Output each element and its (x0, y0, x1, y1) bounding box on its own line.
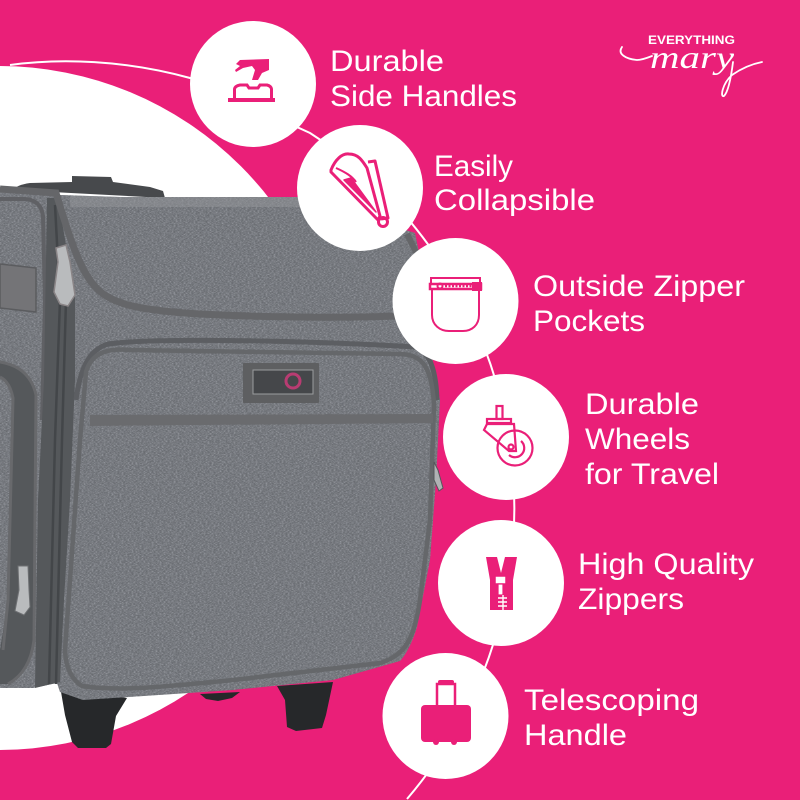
feature circle 4: wheels (443, 374, 569, 500)
front pocket seam (90, 414, 433, 426)
brand logo: Everything Mary (621, 33, 762, 96)
label: High Quality Zippers: Zippers (578, 583, 684, 616)
right wheel foot (277, 682, 333, 731)
lower zipper pull (15, 566, 30, 615)
label: Outside Zipper Pockets: Pockets (533, 305, 645, 338)
label: Telescoping Handle (524, 684, 699, 752)
main vertical zipper band (35, 198, 75, 688)
icon: caster wheel (484, 406, 532, 466)
feature circle 6: telescoping handle (382, 653, 508, 779)
icon: suitcase with handle (421, 680, 471, 745)
brand name plate (243, 363, 319, 403)
label: Durable Side Handles: Durable (330, 45, 444, 78)
left side pocket band (0, 362, 36, 684)
icon: zipper (486, 557, 517, 610)
icon: hand lifting side handle (228, 59, 275, 102)
label: Durable Side Handles: Side Handles (330, 80, 517, 113)
label: High Quality Zippers: High Quality (578, 548, 754, 581)
label: Easily Collapsible (434, 150, 595, 217)
flap right binding (407, 234, 416, 252)
label: Easily Collapsible: Collapsible (434, 184, 595, 217)
bag body (0, 187, 440, 700)
bag fabric texture (0, 170, 450, 710)
side strap patch (0, 264, 36, 312)
icon: zipper pocket (430, 278, 481, 331)
upper zipper pull (54, 245, 75, 306)
right zipper pull (434, 462, 443, 491)
label: Telescoping Handle: Telescoping (524, 684, 699, 717)
zipper teeth (49, 205, 66, 684)
label: Outside Zipper Pockets: Outside Zipper (533, 270, 745, 303)
centre wheel (200, 692, 240, 701)
feature circle 5: zippers (438, 520, 564, 646)
front pocket zipper binding (76, 340, 437, 400)
telescoping handle top (14, 176, 165, 198)
left wheel foot (60, 686, 127, 748)
left pocket binding (0, 362, 36, 684)
brand logo: Everything Mary: EVERYTHING (648, 33, 735, 47)
label: Telescoping Handle: Handle (524, 719, 627, 752)
connector line linking the feature circles (10, 61, 514, 799)
top flap binding (0, 189, 396, 317)
label: Durable Side Handles (330, 45, 517, 113)
product photo: grey rolling craft bag (0, 170, 450, 748)
white background circle (0, 66, 341, 750)
left panel binding (0, 199, 45, 420)
feature circle 1: side handles (190, 21, 316, 147)
label: High Quality Zippers (578, 548, 754, 616)
label: Easily Collapsible: Easily (434, 150, 513, 183)
front pocket second binding (65, 350, 434, 688)
label: Durable Wheels for Travel: Durable (585, 388, 699, 421)
label: Outside Zipper Pockets (533, 270, 745, 338)
icon: collapsed bag (331, 154, 388, 226)
brand logo: Everything Mary: mary (650, 39, 735, 75)
label: Durable Wheels for Travel: for Travel (585, 458, 719, 491)
feature circle 3: zipper pockets (392, 238, 518, 364)
feature circle 2: collapsible (297, 125, 423, 251)
label: Durable Wheels for Travel (585, 388, 719, 491)
label: Durable Wheels for Travel: Wheels (585, 423, 690, 456)
